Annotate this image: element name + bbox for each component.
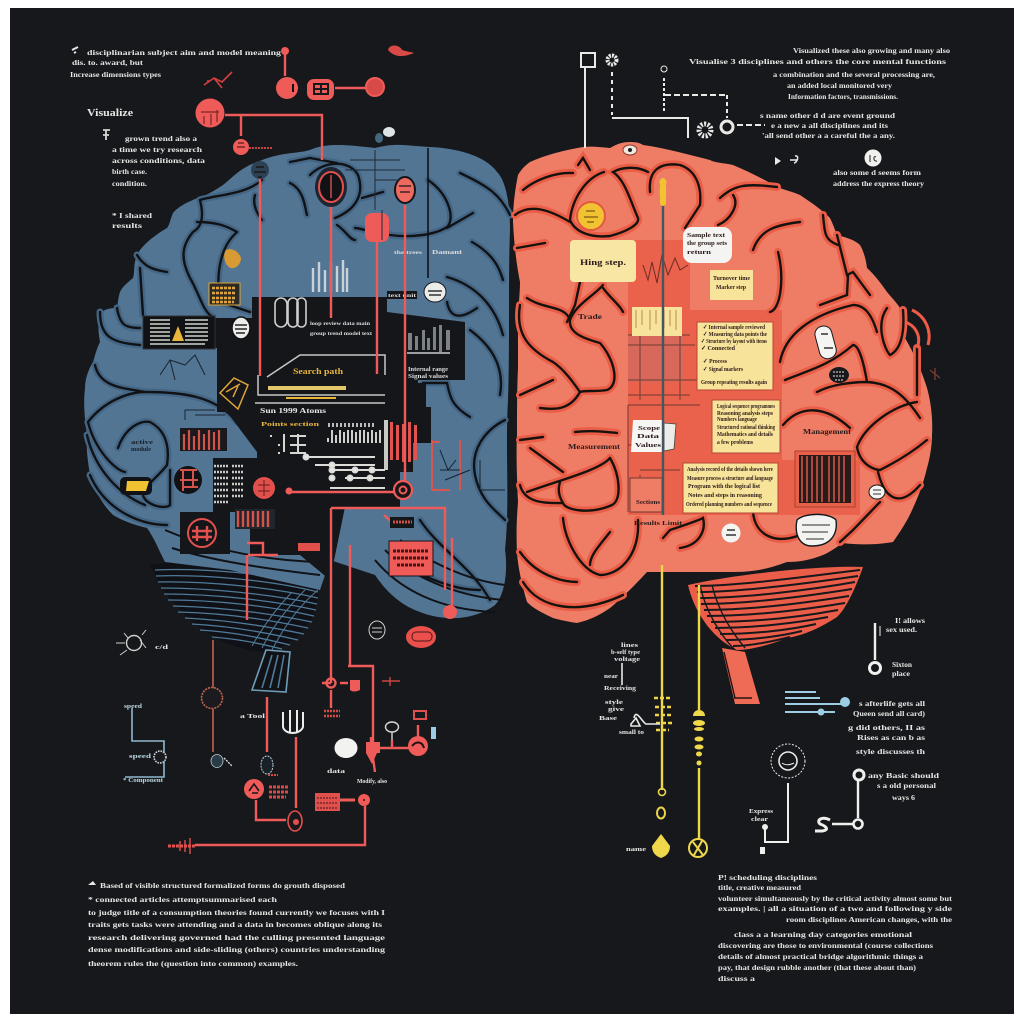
icon: red rounded node <box>365 213 389 242</box>
text block: small note left: results <box>112 222 142 230</box>
text block: bottom-left paragraph <box>88 881 386 968</box>
icon: white pill <box>813 324 838 360</box>
right central shaded panel <box>628 240 860 515</box>
note: yellow checklist one: ✓ Process <box>703 358 727 365</box>
icon: small gear <box>103 130 110 140</box>
text block: right blue note: g did others, II as <box>848 724 925 732</box>
icon: large red disc <box>196 98 224 128</box>
icon: top red tag <box>388 45 414 56</box>
label pair: module <box>131 446 151 453</box>
red arrow mark <box>168 838 195 854</box>
gold bars <box>268 386 346 399</box>
labels beside yellow line: small to <box>619 730 644 736</box>
icon: small white badge right <box>869 485 885 499</box>
icon: gear top <box>608 56 616 64</box>
text block: right ring note: sex used. <box>886 626 917 634</box>
arcs right of brain <box>905 310 929 348</box>
labels beside yellow line: Base <box>599 716 618 722</box>
ring cross node <box>326 678 336 688</box>
yellow connector one <box>652 565 672 858</box>
lined diagram in right centre <box>628 335 700 512</box>
text block: top-right intro: Visualise 3 disciplines and others the core mental functions <box>689 58 946 66</box>
note: white book: Values <box>635 442 662 449</box>
pale process box <box>630 478 662 512</box>
text block: bottom-right first paragraph <box>718 874 953 924</box>
note: yellow checklist two: Numbers language <box>717 416 757 423</box>
blue connector lines <box>785 692 849 714</box>
text block: visualize details: across conditions, data <box>112 157 206 165</box>
top yellow beads <box>660 178 666 206</box>
red striped panel <box>235 509 275 529</box>
icon: white disc <box>864 150 882 166</box>
red tag <box>390 517 414 528</box>
red joint block <box>366 742 380 764</box>
note: yellow checklist three <box>683 463 778 513</box>
heading: Visualize: Visualize <box>87 108 134 119</box>
chart labels <box>310 322 449 380</box>
text block: bottom-right first paragraph: volunteer simultaneously by the critical activity almost some but <box>718 895 953 903</box>
red cross label <box>382 677 400 686</box>
labels lower middle: data <box>327 769 345 775</box>
label: side: Management <box>803 428 852 436</box>
icon: dark head node <box>251 161 269 179</box>
text block: bottom-left paragraph: traits gets tasks were attending and a data in becomes oblique along its <box>88 921 382 929</box>
white ring connector <box>870 623 880 674</box>
icon: white fork <box>283 710 303 733</box>
icon: gold diamond <box>220 378 248 409</box>
text block: small note left: * I shared <box>112 212 152 220</box>
text block: top-right third: address the express theory <box>833 180 925 188</box>
lower left fibres <box>165 530 505 612</box>
text block: bottom-left paragraph: to judge title of a consumption theories found currently we focuses with I <box>88 909 385 917</box>
text block: visualize details: a time we try research <box>112 146 202 154</box>
chart labels: group trend model text <box>310 332 372 337</box>
text block: top-right second: e a new a all disciplines and its <box>771 122 888 130</box>
text block: right blue note: Queen send all card) <box>853 710 926 718</box>
text block: bottom-right first paragraph: title, creative measured <box>718 884 801 892</box>
node dark left <box>211 754 232 768</box>
labels lower middle <box>327 769 387 785</box>
note: white bubble: the group sets <box>687 240 727 247</box>
blue label group: a Tool <box>240 714 266 720</box>
text block: bottom-right second paragraph <box>718 931 933 983</box>
icon: ring node <box>721 121 733 133</box>
red note card <box>389 541 433 576</box>
line graph frame <box>255 355 385 403</box>
icon: grey head <box>369 621 385 639</box>
note: yellow checklist two: Reasoning analysis steps <box>717 410 773 417</box>
icon: atom <box>116 630 146 655</box>
node oval <box>261 756 278 775</box>
text block: right ring note two: s a old personal <box>877 782 936 790</box>
text block: elbow label: Express <box>749 808 774 815</box>
note: yellow checklist one <box>697 322 773 390</box>
right cortex folds <box>515 158 927 607</box>
icon: dashed circle <box>771 744 805 778</box>
red table <box>315 793 340 811</box>
red end disc <box>358 794 370 806</box>
text block: elbow label: clear <box>751 816 768 823</box>
vertical grey axis <box>662 205 664 515</box>
text block: small note left <box>112 212 152 230</box>
note: white bubble: return <box>687 249 712 256</box>
icon: white oval badge <box>232 317 250 339</box>
text block: visualize details: condition. <box>112 180 147 188</box>
text block: bottom-right first paragraph: examples. | all a situation of a two and following y side <box>718 905 952 913</box>
text block: top-right third <box>833 169 925 188</box>
red lower-left circuit <box>195 666 418 845</box>
note: small yellow: Marker step <box>716 284 746 291</box>
icon: white circle seal <box>722 524 740 542</box>
text block: top-right second <box>760 112 895 140</box>
yellow dashes <box>654 698 672 730</box>
right cerebellum <box>688 567 863 650</box>
note: yellow checklist one: ✓ Measuring data points the <box>703 331 767 338</box>
text block: bottom-left paragraph: dense modifications and side-sliding (others) countries understanding <box>88 946 386 954</box>
labels on blue right: Damant <box>432 250 462 256</box>
note: white book <box>631 420 676 452</box>
annotations on blue <box>160 355 410 470</box>
pale bars on blue <box>313 260 347 292</box>
text block: top-left intro <box>70 47 282 79</box>
label: process: Sections <box>636 499 660 506</box>
icon: gold circle <box>577 202 605 230</box>
text block: right blue note: s afterlife gets all <box>859 700 925 708</box>
labels beside yellow line: near <box>604 674 618 680</box>
text block: bottom-left paragraph: theorem rules the (question into common) examples. <box>88 960 298 968</box>
text block: bottom-left paragraph: Based of visible structured formalized forms do grouth disposed <box>100 882 345 890</box>
bar chart: grey bars <box>407 325 450 353</box>
text block: bottom-right first paragraph: room disciplines American changes, with the <box>786 916 952 924</box>
icon: red pin top <box>276 47 298 99</box>
text block: right ring note two: ways 6 <box>892 794 916 802</box>
left cerebellum <box>150 560 320 652</box>
note: white bubble <box>683 227 732 263</box>
text block: visualize details <box>103 130 206 188</box>
note: yellow rounded step <box>570 240 636 282</box>
icon: gold hex <box>224 249 241 268</box>
text block: bottom-left paragraph: research delivering governed had the culling presented language <box>88 934 385 942</box>
gold caption: Points section <box>261 421 320 428</box>
note: yellow rounded step: Hing step. <box>580 257 626 267</box>
labels beside yellow line: give <box>608 707 624 713</box>
note: white bubble: Sample text <box>687 232 726 239</box>
oval label: active <box>131 439 153 446</box>
icon: warning triangle <box>172 326 184 341</box>
small mark right <box>930 368 940 380</box>
text block: bottom-right second paragraph: pay, that design rubble another (that these about than) <box>718 964 917 972</box>
white barcode chart <box>328 420 388 470</box>
text block: bottom-right second paragraph: discuss a <box>718 975 756 983</box>
text block: right ring note: I! allows <box>895 617 925 625</box>
labels beside yellow line: Receiving <box>604 686 636 692</box>
left brain stem <box>252 650 290 692</box>
icon: bullet <box>88 881 96 885</box>
thin line with ring <box>202 640 222 752</box>
text block: top-right second: s name other d d are event ground <box>760 112 895 120</box>
icon: red oval node <box>395 177 415 203</box>
note: yellow checklist two: Logical sequence programmes <box>717 403 775 410</box>
labels on blue right: text unit <box>388 294 417 299</box>
text block: bottom-right second paragraph: discovering are those to environmental (course collections <box>718 942 933 950</box>
icon: red ring right <box>366 78 384 96</box>
text block: right blue note: Rises as can b as <box>857 734 925 742</box>
note: yellow checklist three: Ordered planning numbers and sequence <box>686 501 772 508</box>
icon: red rounded module <box>307 79 334 100</box>
yellow beads <box>693 710 705 766</box>
text block: bottom-right second paragraph: details of almost practical bridge algorithmic things a <box>718 953 924 961</box>
right cortex shape <box>513 142 932 623</box>
white elbow connector <box>760 783 788 854</box>
icon: tiny circle <box>661 66 667 72</box>
text block: right blue note <box>848 700 926 756</box>
text block: right ring note two <box>868 772 939 802</box>
text block: top-left intro: disciplinarian subject aim and model meaning <box>87 49 282 57</box>
icon: red blob <box>406 626 436 648</box>
note: yellow checklist two: Mathematics and details <box>717 431 773 438</box>
white connector rows <box>304 454 385 488</box>
central dark circuit panel <box>213 297 465 580</box>
note: yellow checklist two: a few problems <box>717 439 753 446</box>
icon: red egg ring <box>288 811 302 831</box>
red small tag <box>269 787 288 797</box>
icon: yellow small node <box>657 808 665 818</box>
icon: gray tower <box>345 150 405 240</box>
note: small yellow <box>710 270 753 300</box>
icon: yellow crossed ring <box>689 839 707 857</box>
small blue box <box>431 727 436 739</box>
red bars chart <box>390 422 417 462</box>
text block: top-left intro: Increase dimensions types <box>70 71 161 79</box>
icon: striped barcode <box>795 451 855 507</box>
icon: small red disc <box>233 139 272 155</box>
red bars on blue <box>180 428 227 451</box>
icon: bullet <box>72 47 78 53</box>
text block: top-right intro: a combination and the several processing are, <box>773 71 935 79</box>
note: yellow checklist two: Structured rational thinking <box>717 424 776 431</box>
labels on blue right <box>387 250 462 299</box>
icon: red cup <box>350 680 360 692</box>
shaded rectangle <box>628 335 683 382</box>
panel: warning stripes <box>143 316 215 349</box>
note: yellow checklist three: Measure process a structure and language <box>687 475 773 482</box>
icon: yellow star bead <box>658 788 666 796</box>
icon: red face chart <box>174 466 202 494</box>
data table <box>214 466 244 502</box>
icon: red ring oval <box>315 167 347 207</box>
white big oval <box>334 738 358 758</box>
text block: top-right intro: an added local monitored very <box>787 82 893 90</box>
text block: top-right second: 'all send other a a careful the a any. <box>762 132 895 140</box>
text block: top-right intro: Information factors, transmissions. <box>788 93 898 101</box>
red small box <box>414 711 426 719</box>
note: yellow checklist one: ✓ Signal markers <box>703 366 743 373</box>
right brain hemisphere <box>513 142 932 704</box>
text block: bottom-left paragraph: * connected articles attemptsummarised each <box>88 896 277 904</box>
text block: right ring note two: any Basic should <box>868 772 939 780</box>
label: Trade: Trade <box>578 312 603 321</box>
labels beside yellow line: style <box>605 700 624 706</box>
icon: small square <box>581 53 595 67</box>
text block: visualize details: grown trend also a <box>125 135 198 143</box>
labels beside yellow line: b-self type <box>611 650 640 656</box>
icon: red disc circuit <box>253 477 292 499</box>
blue label group: speed <box>124 704 143 710</box>
blue elbow <box>125 708 166 777</box>
labels beside yellow line <box>599 643 646 853</box>
thin black rule <box>427 148 429 278</box>
icon: red scribble label <box>204 72 232 88</box>
text block: top-left intro: dis. to. award, but <box>72 59 144 67</box>
note: yellow checklist three: Notes and steps in reasoning <box>688 492 763 499</box>
text block: right ring sublabel: place <box>892 670 910 678</box>
chart labels: Signal values <box>408 373 449 380</box>
note: white book: Scope <box>638 425 660 432</box>
left cortex folds <box>87 158 510 600</box>
text block: top-right third: also some d seems form <box>833 169 921 177</box>
right brain stem <box>722 648 760 704</box>
white dot plot <box>270 434 306 454</box>
fine scribble chart <box>643 255 688 283</box>
icon: gold box <box>209 283 240 305</box>
text block: right ring sublabel: Sixton <box>892 661 912 669</box>
text block: right ring note <box>886 617 925 634</box>
note: white blob <box>796 514 836 546</box>
labels beside yellow line: lines <box>621 643 639 649</box>
red bars label <box>324 711 340 716</box>
labels beside yellow line: voltage <box>614 657 640 663</box>
text block: visualize details: birth case. <box>112 168 147 176</box>
icon: white oval top <box>375 127 395 143</box>
note: small yellow: Turnover time <box>713 275 750 282</box>
note: yellow checklist one: ✓ Structure by layout with items <box>701 338 767 345</box>
note: yellow striped <box>632 307 682 336</box>
red connector network: upper <box>225 52 452 683</box>
gold chart title: Search path <box>293 367 344 376</box>
left brain hemisphere <box>84 145 510 692</box>
small red bars <box>298 543 320 551</box>
blue label group <box>123 704 266 784</box>
white ring head <box>386 722 398 740</box>
note: yellow checklist three: Program with the logical list <box>688 483 761 490</box>
blue label group: speed <box>129 754 152 760</box>
labels on blue right: the trees <box>394 251 422 256</box>
icon: red disc arrow <box>244 779 264 799</box>
side circuit on blue <box>432 440 460 490</box>
white caption: Sun 1999 Atoms <box>260 407 326 415</box>
blue annotations <box>440 450 505 490</box>
icon: dark oval <box>829 367 849 383</box>
icon: top white badge <box>623 145 637 155</box>
chart labels: loop review data main <box>310 322 370 327</box>
yellow connector two <box>689 585 707 857</box>
icon: yellow tag <box>120 477 152 495</box>
left white tree <box>622 663 660 726</box>
label: left panel: Measurement <box>568 443 621 451</box>
text block: elbow label <box>749 808 774 823</box>
red end node <box>443 605 457 619</box>
chart labels: Internal range <box>408 366 448 373</box>
labels beside yellow line: name <box>626 847 646 853</box>
icon: white glyph <box>790 156 798 163</box>
icon: outlined pills <box>275 298 306 327</box>
text block: top-right intro <box>689 47 951 101</box>
blue label group: * Component <box>123 778 163 784</box>
white top-right circuit <box>581 53 765 148</box>
icon: white small badge <box>424 282 446 302</box>
icon: white play <box>775 157 781 165</box>
text block: bottom-right first paragraph: P! scheduling disciplines <box>718 874 817 882</box>
icon: red target <box>394 481 412 499</box>
atom label: c/d <box>155 645 169 651</box>
text block: right blue note: style discusses th <box>856 748 925 756</box>
left cortex shape <box>84 145 510 618</box>
text block: right ring sublabel <box>892 661 912 678</box>
note: white book: Data <box>637 433 660 440</box>
note: yellow checklist one: ✓ Internal sample reviewed <box>703 324 765 331</box>
text block: top-right intro: Visualized these also growing and many also <box>793 47 951 55</box>
red right disc <box>408 736 428 756</box>
note: yellow checklist one: Group repeating results again <box>701 379 767 386</box>
icon: gear mid <box>699 124 711 136</box>
icon: hash ring <box>180 512 230 554</box>
note: yellow checklist three: Analysis record of the details shown here <box>687 466 773 473</box>
note: yellow checklist two <box>712 400 780 453</box>
labels lower middle: Modify, also <box>357 779 387 785</box>
note: yellow checklist one: ✓ Connected <box>701 345 735 352</box>
text block: bottom-right second paragraph: class a a learning day categories emotional <box>734 931 912 939</box>
icon: yellow bulb <box>652 834 670 858</box>
ring S connector <box>815 770 864 831</box>
label: bottom left: Results Limit <box>634 520 683 527</box>
